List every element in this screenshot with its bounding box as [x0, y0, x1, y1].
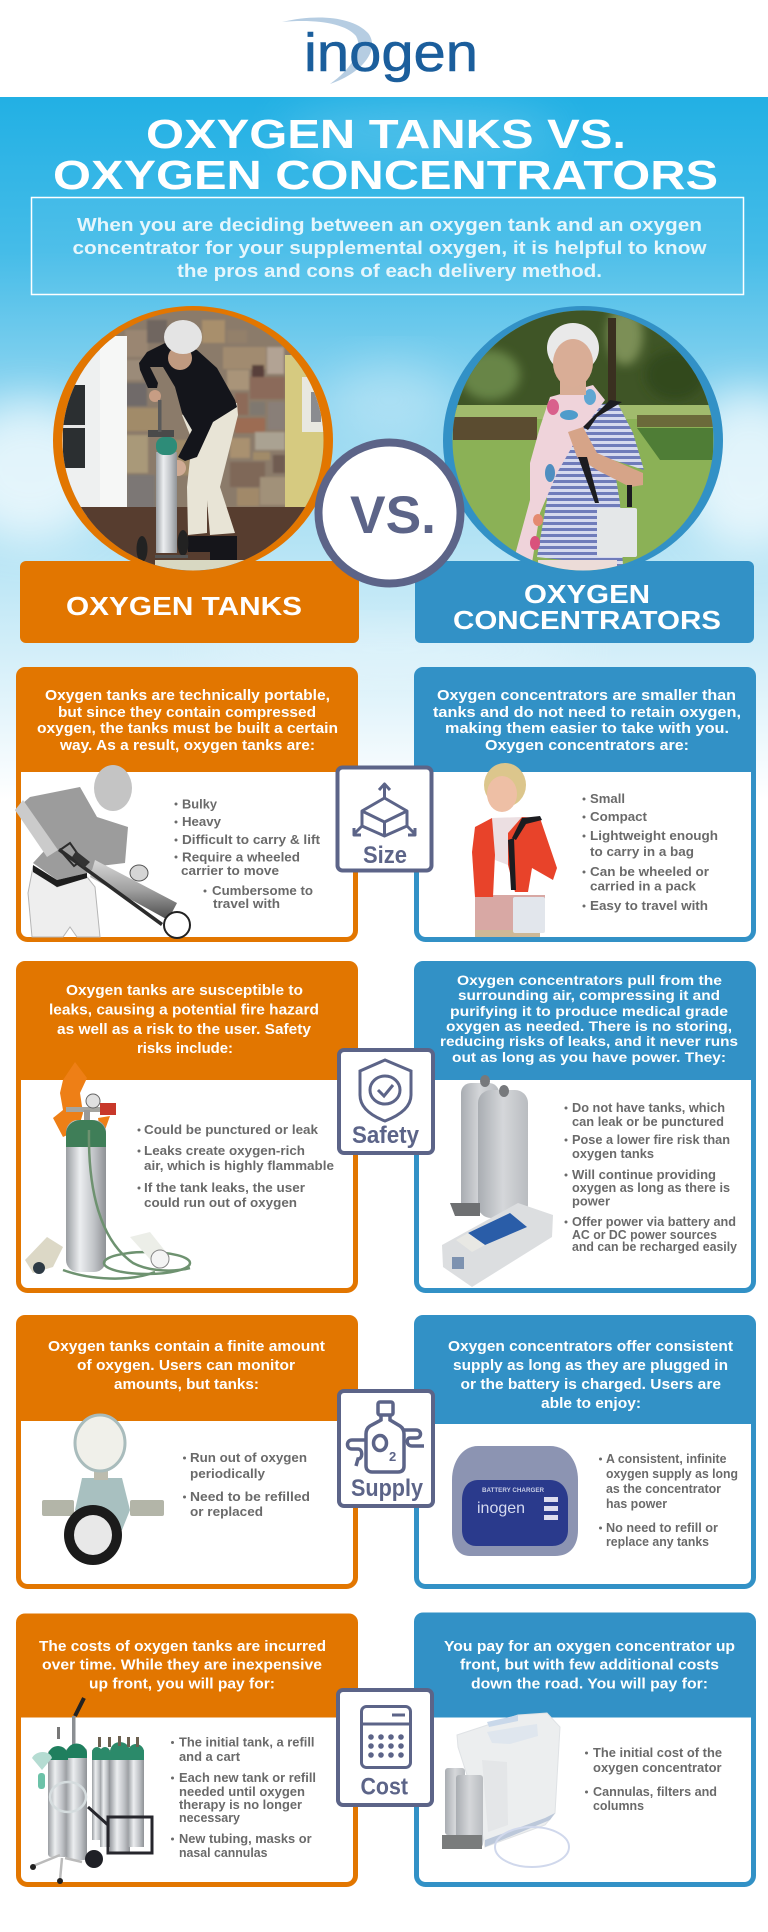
bullet list: Can be wheeled or — [590, 865, 709, 879]
bullet list: can leak or be punctured — [572, 1115, 724, 1129]
title: OXYGEN CONCENTRATORS — [53, 152, 718, 198]
header text: tanks and do not need to retain oxygen, — [433, 704, 741, 721]
badge: supply — [339, 1391, 433, 1506]
badge label: Supply — [351, 1475, 424, 1502]
bullet list: Leaks create oxygen-rich — [144, 1144, 305, 1158]
bullet list: New tubing, masks or — [179, 1832, 312, 1846]
bullet list — [582, 792, 718, 913]
bullet list: Need to be refilled — [190, 1490, 310, 1504]
badge label: Safety — [352, 1122, 420, 1149]
header text: Oxygen concentrators are: — [485, 737, 689, 754]
bullet list — [564, 1101, 737, 1254]
panel: cost, tanks — [16, 1614, 358, 1884]
panel: size, tanks — [15, 667, 358, 940]
panel: safety, concentrators — [414, 961, 756, 1290]
header text: as well as a risk to the user. Safety — [57, 1021, 312, 1038]
shirt — [537, 402, 644, 567]
bullet list — [174, 798, 321, 911]
header text: supply as long as they are plugged in — [453, 1357, 728, 1374]
bullet list: Bulky — [182, 798, 217, 812]
header text — [39, 1638, 326, 1692]
bullet list: could run out of oxygen — [144, 1196, 297, 1210]
bullet list: oxygen tanks — [572, 1147, 654, 1161]
header text — [448, 1338, 733, 1412]
panel header — [414, 961, 756, 1080]
bullet list: Run out of oxygen — [190, 1451, 307, 1465]
floor — [81, 507, 305, 570]
bullet list: to carry in a bag — [590, 845, 694, 859]
bag — [597, 508, 637, 557]
header text: risks include: — [137, 1040, 233, 1057]
badge label: Size — [363, 842, 407, 869]
panel header — [414, 1315, 756, 1424]
bullet list: Lightweight enough — [590, 829, 718, 843]
bullet list: power — [572, 1194, 610, 1208]
bullet list: Cumbersome to — [212, 884, 313, 898]
bullet list: Could be punctured or leak — [144, 1123, 318, 1137]
header text: up front, you will pay for: — [89, 1676, 275, 1692]
illustration: battery charger: inogen — [477, 1500, 525, 1517]
bullet list: or replaced — [190, 1505, 263, 1519]
header text: You pay for an oxygen concentrator up — [444, 1638, 735, 1655]
header text: able to enjoy: — [541, 1395, 641, 1412]
bullet list: oxygen supply as long — [606, 1467, 738, 1481]
bullet list: oxygen as long as there is — [572, 1181, 730, 1195]
intro text box: concentrator for your supplemental oxygen, it is helpful to know — [72, 237, 707, 258]
header text: Oxygen concentrators offer consistent — [448, 1338, 733, 1355]
bullet list: as the concentrator — [606, 1482, 721, 1496]
bullet list: Difficult to carry & lift — [182, 833, 321, 847]
bullet list — [138, 1123, 334, 1210]
logo swoosh — [282, 17, 372, 84]
header text: amounts, but tanks: — [114, 1376, 259, 1393]
bullet list: air, which is highly flammable — [144, 1159, 334, 1173]
woman pants — [182, 403, 238, 535]
header text: of oxygen. Users can monitor — [77, 1357, 295, 1374]
logo wordmark: inogen — [304, 23, 478, 83]
illustration: woman in red cardigan — [472, 763, 557, 937]
bullet list: necessary — [179, 1811, 240, 1825]
header text: Oxygen concentrators pull from the — [457, 972, 722, 988]
header text — [49, 982, 319, 1057]
header band with logo — [0, 0, 768, 97]
bullet list: travel with — [213, 897, 280, 911]
bullet list: Heavy — [182, 815, 221, 829]
bullet list: Small — [590, 792, 625, 806]
bullet list: replace any tanks — [606, 1535, 709, 1549]
VS badge: VS. — [350, 486, 436, 545]
panel header — [414, 1612, 756, 1718]
illustration: regulator gauge — [42, 1415, 164, 1565]
panel: supply, concentrators — [414, 1315, 756, 1586]
panel header — [16, 1614, 358, 1718]
woman sweater — [139, 342, 237, 461]
bullet list — [171, 1736, 316, 1860]
bullet list: needed until oxygen — [179, 1785, 305, 1799]
bullet list: A consistent, infinite — [606, 1452, 727, 1466]
bullet list — [183, 1451, 310, 1519]
header text — [444, 1638, 735, 1692]
header text: Oxygen tanks are susceptible to — [66, 982, 303, 999]
siding — [285, 355, 324, 507]
pants — [538, 560, 617, 570]
header text: or the battery is charged. Users are — [460, 1376, 721, 1393]
photo: woman with portable concentrator — [440, 300, 730, 580]
bullet list: Compact — [590, 810, 648, 824]
header text — [433, 687, 741, 754]
arm — [568, 427, 643, 487]
photo: woman with oxygen tank — [50, 300, 340, 580]
bullet list: The initial tank, a refill — [179, 1736, 314, 1750]
bullet list: nasal cannulas — [179, 1846, 268, 1860]
badge: size — [338, 768, 432, 870]
bullet list: Require a wheeled — [182, 850, 300, 864]
panel header — [16, 1315, 358, 1421]
header text: Oxygen concentrators are smaller than — [437, 687, 736, 704]
bullet list: and can be recharged easily — [572, 1240, 737, 1254]
sky background — [0, 97, 768, 800]
header text: leaks, causing a potential fire hazard — [49, 1002, 319, 1018]
bullet list: periodically — [190, 1467, 265, 1481]
panel header — [414, 667, 756, 772]
label: oxygen tanks — [20, 561, 359, 643]
head — [560, 381, 586, 395]
bullet list: If the tank leaks, the user — [144, 1181, 305, 1195]
header text — [48, 1338, 325, 1393]
header text: Oxygen tanks are technically portable, — [45, 687, 330, 704]
header text: making them easier to take with you. — [445, 720, 729, 737]
header text: Oxygen tanks contain a finite amount — [48, 1338, 325, 1355]
bullet list: and a cart — [179, 1750, 241, 1764]
badge: safety — [339, 1050, 433, 1153]
icon: shield with check — [360, 1060, 411, 1121]
header text: but since they contain compressed — [58, 704, 316, 721]
bullet list: AC or DC power sources — [572, 1228, 717, 1242]
badge: supply: 2 — [389, 1449, 396, 1464]
tank — [156, 452, 177, 553]
label: oxygen concentrators: CONCENTRATORS — [453, 605, 721, 635]
bullet list: Do not have tanks, which — [572, 1101, 725, 1115]
label: oxygen concentrators: OXYGEN — [524, 579, 650, 609]
bullet list: Each new tank or refill — [179, 1771, 316, 1785]
badge: cost — [338, 1690, 432, 1805]
illustration: man tilting tank — [15, 765, 190, 938]
icon: O2 tank — [348, 1402, 424, 1472]
header text: oxygen as needed. There is no storing, — [446, 1018, 732, 1034]
label: oxygen tanks: OXYGEN TANKS — [66, 591, 302, 621]
title — [53, 111, 718, 198]
header text: out as long as you have power. They: — [452, 1049, 726, 1065]
bullet list: Will continue providing — [572, 1168, 716, 1182]
panel: size, concentrators — [414, 667, 756, 940]
header text: purifying it to produce medical grade — [450, 1003, 728, 1019]
bullet list — [599, 1452, 738, 1549]
bullet list: columns — [593, 1799, 644, 1813]
intro text box — [32, 198, 744, 294]
header text: front, but with few additional costs — [460, 1656, 719, 1674]
illustration: battery charger — [452, 1446, 578, 1556]
bullet list — [585, 1746, 722, 1813]
bullet list: Pose a lower fire risk than — [572, 1133, 730, 1147]
panel: supply, tanks — [16, 1315, 358, 1586]
bullet list: The initial cost of the — [593, 1746, 722, 1760]
bullet list: Cannulas, filters and — [593, 1785, 717, 1799]
illustration: portable concentrator — [442, 1713, 569, 1867]
panel header — [16, 961, 358, 1080]
scarf — [515, 385, 605, 563]
strap — [578, 400, 632, 507]
panel: safety, tanks — [16, 961, 358, 1290]
illustration: columns and battery — [442, 1075, 553, 1287]
panel: cost, concentrators — [414, 1612, 756, 1884]
header text: The costs of oxygen tanks are incurred — [39, 1638, 326, 1655]
panel header — [16, 667, 358, 772]
header text: oxygen, the tanks must be built a certain — [37, 720, 338, 737]
header text — [440, 972, 738, 1065]
VS badge — [318, 442, 460, 584]
bullet list: No need to refill or — [606, 1521, 718, 1535]
bullet list: carried in a pack — [590, 880, 696, 894]
header text: way. As a result, oxygen tanks are: — [59, 737, 315, 754]
bullet list: oxygen concentrator — [593, 1761, 722, 1775]
header text — [37, 687, 338, 754]
header text: surrounding air, compressing it and — [458, 987, 720, 1003]
header text: reducing risks of leaks, and it never runs — [440, 1033, 738, 1049]
illustration: leaking tank with flames — [25, 1062, 190, 1279]
illustration: cylinders on cart — [30, 1698, 152, 1884]
badge label: Cost — [360, 1774, 408, 1800]
icon: cube with arrows — [354, 784, 415, 836]
icon: calculator — [362, 1706, 410, 1768]
header text: down the road. You will pay for: — [471, 1676, 708, 1692]
title: OXYGEN TANKS VS. — [146, 111, 626, 157]
bullet list: has power — [606, 1497, 667, 1511]
header text: over time. While they are inexpensive — [42, 1656, 322, 1674]
door and window — [62, 340, 110, 516]
illustration: battery charger: BATTERY CHARGER — [482, 1487, 544, 1494]
bullet list: therapy is no longer — [179, 1798, 302, 1812]
label: oxygen concentrators — [415, 561, 754, 643]
bullet list: Offer power via battery and — [572, 1215, 736, 1229]
bullet list: carrier to move — [181, 864, 279, 878]
intro text box: When you are deciding between an oxygen tank and an oxygen — [77, 214, 702, 235]
intro text box: the pros and cons of each delivery method. — [177, 260, 602, 281]
bullet list: Easy to travel with — [590, 899, 708, 913]
